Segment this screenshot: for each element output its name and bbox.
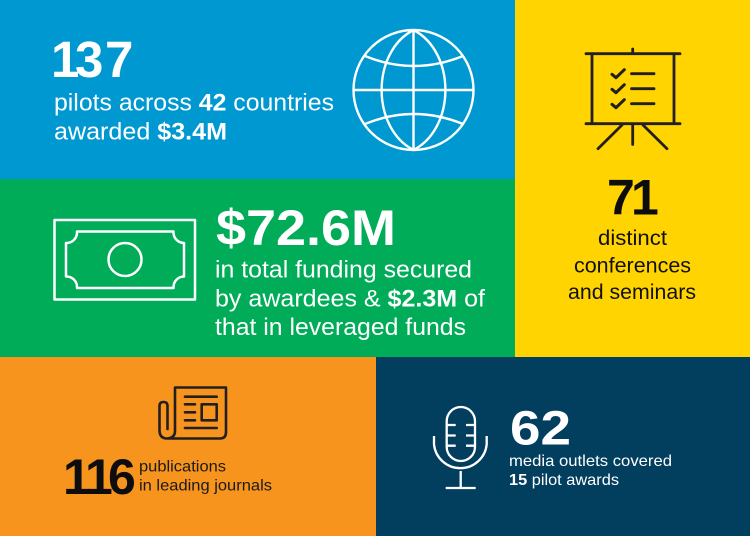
text: total funding secured: in total funding secured [215, 257, 472, 284]
text: pilots across 42 countries awarded $3.4M [54, 90, 334, 145]
icon: presentation board [586, 49, 680, 149]
stat: 116: 116 [63, 449, 136, 505]
text: publications in leading journals [139, 459, 272, 495]
icon: newspaper [160, 388, 226, 438]
panel: pilots [0, 0, 515, 180]
text: media outlets covered 15 pilot awards: media outlets covered [509, 453, 672, 470]
panel background: navy [376, 357, 750, 536]
panel background: orange [0, 357, 376, 536]
stat: 71: 71 [607, 169, 659, 225]
panel: funding [0, 179, 515, 358]
text: distinct conferences and seminars [568, 227, 696, 304]
stat: 62: 62 [510, 402, 571, 456]
panel: conferences [515, 0, 750, 358]
text: media outlets covered 15 pilot awards: 15 pilot awards [509, 472, 619, 489]
panel: publications [0, 357, 376, 536]
text: distinct conferences and seminars: and seminars [568, 281, 696, 304]
text: pilots across 42 countries awarded $3.4M: pilots across 42 countries [54, 90, 334, 117]
text: distinct conferences and seminars: conferences [574, 254, 691, 277]
icon: microphone [434, 407, 487, 488]
icon: banknote [54, 220, 195, 300]
text: distinct conferences and seminars: distinct [598, 227, 667, 250]
panel background: blue [0, 0, 515, 180]
panel background: green [0, 179, 515, 358]
text: publications in leading journals: in leading journals [139, 478, 272, 495]
text: total funding secured [215, 257, 485, 341]
panel background: yellow [515, 0, 750, 358]
text: media outlets covered 15 pilot awards [509, 453, 672, 489]
stat: 137: 137 [51, 31, 133, 88]
text: publications in leading journals: publications [139, 459, 226, 476]
panel: media [376, 357, 750, 536]
icon: globe [354, 30, 474, 150]
text: total funding secured: by awardees & $2.3M of [215, 286, 485, 313]
text: total funding secured: that in leveraged funds [215, 314, 466, 341]
stat: $72.6M: $72.6M [216, 200, 396, 256]
text: pilots across 42 countries awarded $3.4M: awarded $3.4M [54, 118, 227, 145]
